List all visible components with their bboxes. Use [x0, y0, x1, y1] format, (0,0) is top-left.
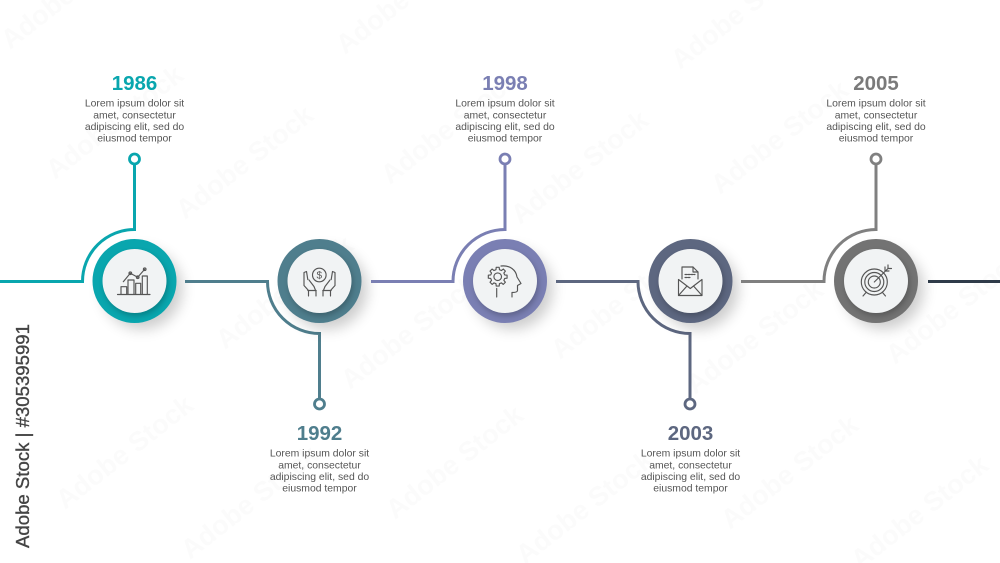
description 1998: eiusmod tempor: [468, 134, 543, 144]
description 2003: Lorem ipsum dolor sit: [641, 448, 740, 460]
timeline step 1986: [0, 72, 184, 329]
pin dot 1992: [314, 399, 324, 409]
circle 2005: [834, 239, 924, 329]
description 2003: adipiscing elit, sed do: [641, 472, 740, 483]
circle 1986: [92, 239, 182, 329]
description 2005: amet, consectetur: [835, 110, 918, 121]
timeline step 2003: [556, 239, 740, 494]
description 1992: adipiscing elit, sed do: [270, 472, 369, 483]
text: Adobe Stock: [335, 269, 485, 395]
circle 1992: [278, 239, 367, 329]
text: Adobe Stock: [545, 239, 695, 365]
connector line 1998: [371, 162, 505, 282]
text: Adobe Stock: [40, 59, 190, 185]
text: Adobe Stock: [380, 399, 530, 525]
description 1986: eiusmod tempor: [97, 134, 172, 144]
icon: head with gear: [488, 266, 521, 297]
icon: hands with coin: [304, 268, 335, 296]
timeline step 2005: [741, 72, 1000, 329]
description 1998: amet, consectetur: [464, 110, 547, 121]
text: Adobe Stock: [715, 409, 865, 535]
year 1998: 1998: [482, 72, 528, 95]
icon: target with arrow: [861, 265, 892, 296]
year 1986: 1986: [112, 72, 157, 95]
stock credit: Adobe Stock | #305395991: [12, 324, 33, 548]
description 2003: eiusmod tempor: [653, 484, 728, 494]
connector line 1992: [185, 282, 320, 401]
description 1992: amet, consectetur: [278, 460, 361, 471]
description 1992: eiusmod tempor: [282, 484, 357, 494]
description 1986: amet, consectetur: [93, 110, 176, 121]
timeline step 1992: [185, 239, 369, 494]
connector line 2005: [741, 162, 876, 282]
description 1986: Lorem ipsum dolor sit: [85, 98, 184, 110]
pin dot 1986: [130, 154, 140, 164]
text: Adobe Stock: [375, 64, 525, 190]
text: Adobe Stock: [505, 104, 655, 230]
pin dot 2005: [871, 154, 881, 164]
text: Adobe Stock: [705, 74, 855, 200]
pin dot 2003: [685, 399, 695, 409]
text: Adobe Stock: [50, 389, 200, 515]
timeline step 1998: [371, 72, 555, 329]
closing line: [928, 280, 1000, 283]
description 2003: amet, consectetur: [649, 460, 732, 471]
text: Adobe Stock: [210, 229, 360, 355]
text: Adobe Stock: [680, 274, 830, 400]
description 2005: adipiscing elit, sed do: [826, 122, 926, 133]
icon: hands with coin: $: [317, 270, 323, 282]
year 2003: 2003: [668, 422, 713, 445]
year 2005: 2005: [853, 72, 899, 95]
description 1986: adipiscing elit, sed do: [85, 122, 184, 133]
icon: bar chart: [118, 268, 150, 294]
description 1992: Lorem ipsum dolor sit: [270, 448, 369, 460]
connector line 1986: [0, 162, 134, 282]
description 1998: Lorem ipsum dolor sit: [455, 98, 555, 110]
description 2005: Lorem ipsum dolor sit: [826, 98, 926, 110]
icon: envelope with letter: [678, 267, 702, 296]
description 2005: eiusmod tempor: [839, 134, 914, 144]
pin dot 1998: [500, 154, 510, 164]
description 1998: adipiscing elit, sed do: [455, 122, 555, 133]
circle 1998: [463, 239, 552, 329]
text: Adobe Stock: [175, 439, 325, 563]
circle 2003: [648, 239, 738, 329]
text: Adobe Stock: [170, 99, 320, 225]
connector line 2003: [556, 282, 690, 401]
year 1992: 1992: [297, 422, 342, 445]
